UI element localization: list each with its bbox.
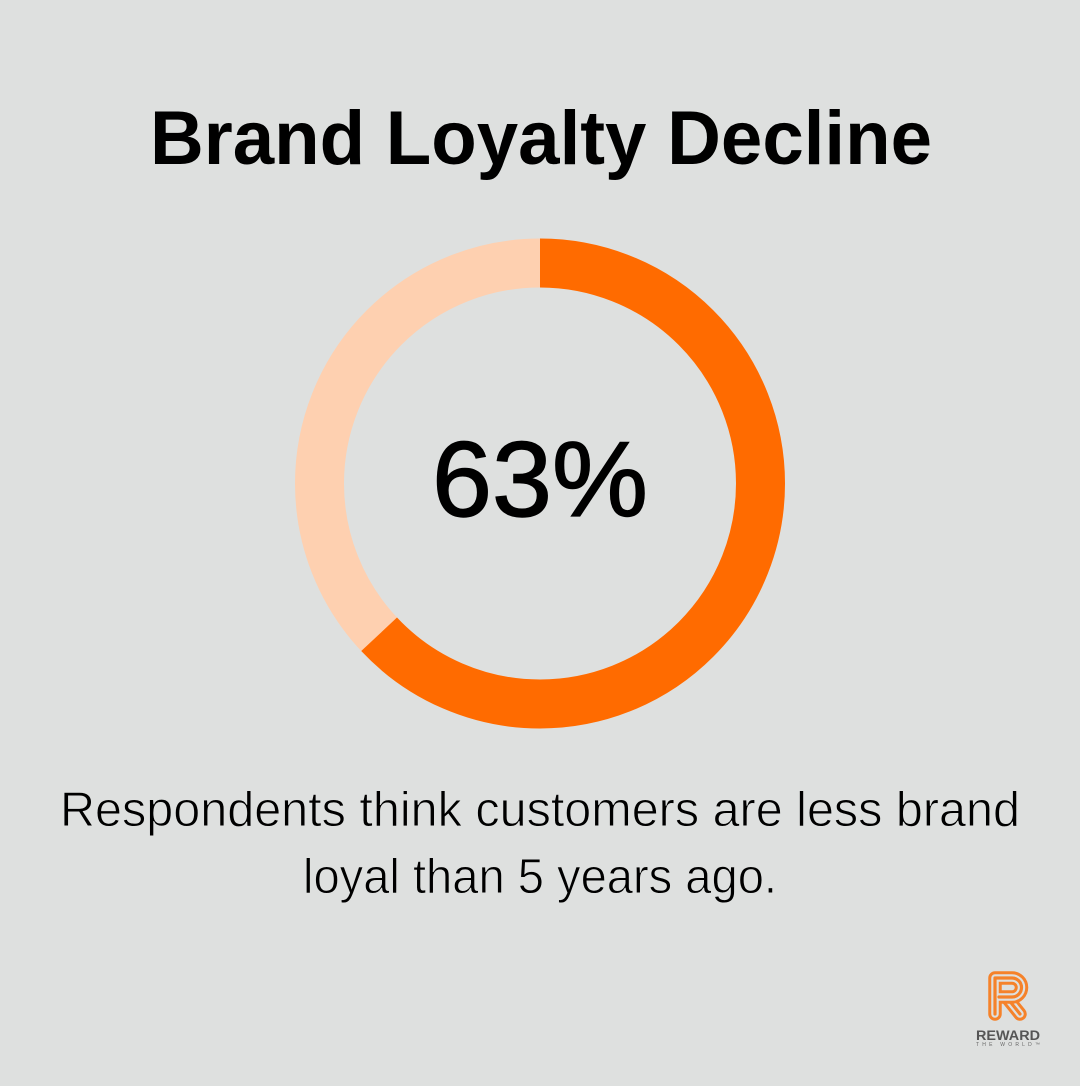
logo wordmark: REWARD [976,1028,1040,1043]
description text [60,782,1020,904]
description text: Respondents think customers are less brand [60,782,1020,837]
description text: loyal than 5 years ago. [303,849,777,904]
logo tagline: THE WORLD™ [976,1042,1040,1048]
icon: R mark [995,978,1022,1014]
title: Brand Loyalty Decline [150,96,932,181]
donut chart: 63% [320,263,760,704]
center value: 63% [432,419,648,539]
logo: Reward the World [976,978,1040,1048]
